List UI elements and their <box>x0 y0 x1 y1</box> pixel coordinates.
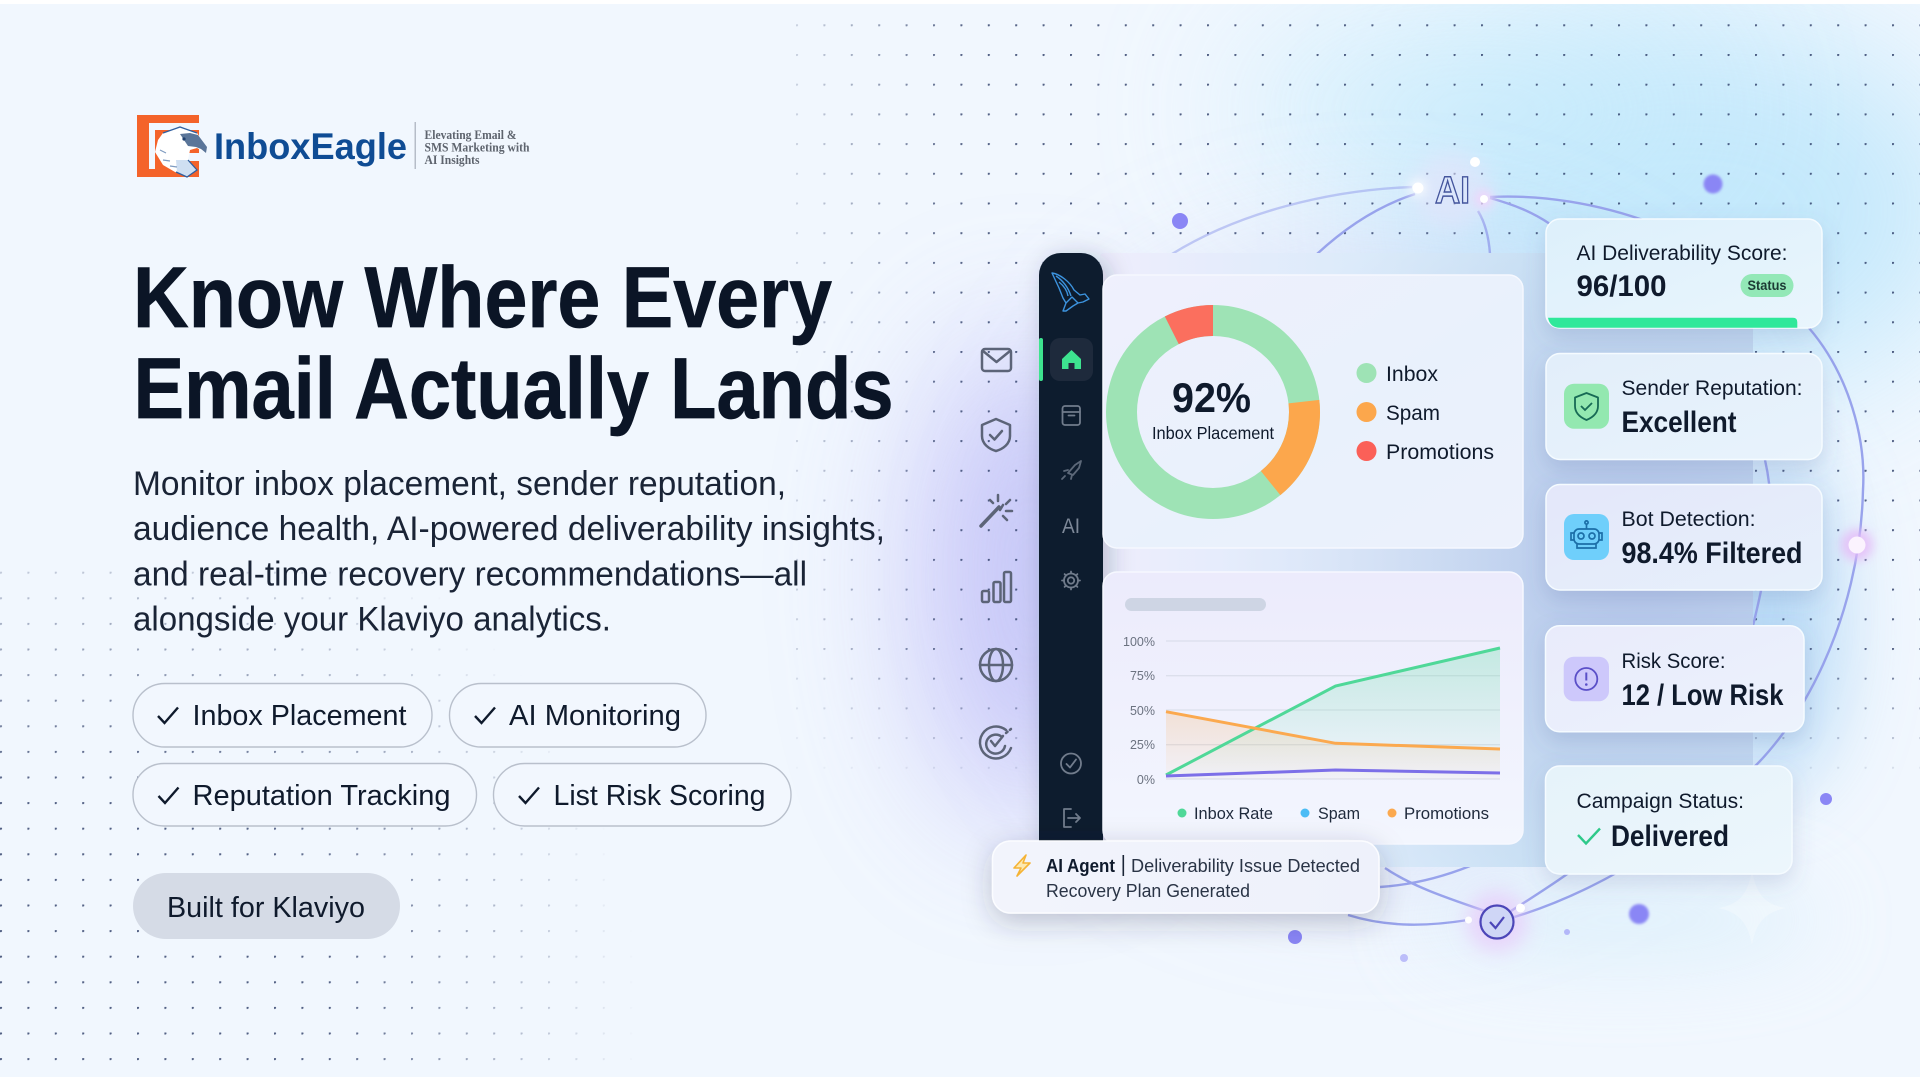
description paragraph: alongside your Klaviyo analytics. <box>133 600 611 638</box>
card: sender reputation <box>1546 354 1822 460</box>
chart legend: Spam <box>1318 805 1360 823</box>
card: risk score: Risk Score: <box>1622 649 1726 673</box>
icon: eagle logo <box>1052 273 1089 311</box>
card: bot detection: 98.4% Filtered <box>1622 537 1802 570</box>
card: AI deliverability score: 96/100 <box>1576 270 1666 303</box>
icon: magic wand <box>981 495 1012 526</box>
chip: List Risk Scoring <box>494 764 791 826</box>
panel: inbox placement donut <box>1103 275 1523 548</box>
node: right orbit <box>1841 529 1873 561</box>
donut legend <box>1356 362 1494 464</box>
icon: target check <box>980 726 1011 758</box>
donut legend: Inbox <box>1386 362 1438 386</box>
icon: gear <box>1062 572 1080 590</box>
title: Know Where Every <box>133 250 832 346</box>
title <box>133 250 894 437</box>
spam segment <box>1271 402 1304 483</box>
logo tagline: SMS Marketing with <box>424 140 530 154</box>
callout: AI agent <box>992 841 1379 913</box>
y axis labels: 50% <box>1130 704 1155 718</box>
progress bar <box>1548 318 1797 328</box>
icon: shield <box>1564 384 1609 429</box>
donut legend: Promotions <box>1386 440 1494 464</box>
icon: robot <box>1564 514 1609 560</box>
card: AI deliverability score <box>1546 219 1822 328</box>
area fills and lines <box>1166 648 1500 779</box>
sidebar <box>1039 253 1103 863</box>
y axis labels: 75% <box>1130 669 1155 683</box>
callout: AI agent: Recovery Plan Generated <box>1046 881 1250 901</box>
chip: Inbox Placement: Inbox Placement <box>192 700 407 732</box>
card: campaign status <box>1546 766 1792 874</box>
y axis labels: 0% <box>1137 773 1155 787</box>
chip: Reputation Tracking: Reputation Tracking <box>192 780 450 812</box>
callout: AI agent: Deliverability Issue Detected <box>1131 856 1360 876</box>
description paragraph: and real-time recovery recommendations—all <box>133 556 807 594</box>
dashboard panel <box>1100 253 1753 867</box>
title: Email Actually Lands <box>134 341 894 437</box>
icon: archive box <box>1062 406 1080 425</box>
description paragraph <box>133 465 885 638</box>
promotions segment <box>1172 320 1213 330</box>
description paragraph: Monitor inbox placement, sender reputation, <box>133 465 786 503</box>
icon: alert <box>1564 657 1609 701</box>
donut legend: Spam <box>1386 401 1440 425</box>
AI label with nodes <box>1409 152 1493 228</box>
icon: mail <box>982 349 1011 371</box>
logo tagline: AI Insights <box>424 153 480 167</box>
card: bot detection: Bot Detection: <box>1622 507 1756 531</box>
donut chart <box>1122 320 1304 504</box>
left icon rail <box>980 349 1012 758</box>
y axis labels: 100% <box>1123 635 1155 649</box>
logo tagline: Elevating Email & <box>424 128 516 142</box>
dot grid: bottom left <box>0 565 640 1077</box>
logo mark: eagle head <box>155 127 207 177</box>
floating purple dots <box>1172 174 1832 962</box>
chart legend <box>1178 805 1489 823</box>
placeholder title bar <box>1125 598 1266 611</box>
callout text: AI Agent <box>1046 856 1115 876</box>
logo mark: orange frame <box>137 115 199 177</box>
AI outlined text: AI <box>1435 170 1470 212</box>
card: sender reputation: Sender Reputation: <box>1622 376 1802 400</box>
description paragraph: audience health, AI-powered deliverability insights, <box>133 510 885 548</box>
card: risk score <box>1546 626 1804 732</box>
dot grid: top right <box>790 20 1920 792</box>
chip: List Risk Scoring: List Risk Scoring <box>554 780 766 812</box>
card: risk score: 12 / Low Risk <box>1622 679 1784 712</box>
chart legend: Promotions <box>1404 805 1489 823</box>
active home tile <box>1050 338 1093 381</box>
chip: Reputation Tracking <box>133 764 476 826</box>
decorative star <box>1718 870 1786 945</box>
active indicator <box>1039 338 1043 381</box>
card: bot detection <box>1546 484 1822 590</box>
icon: home <box>1062 350 1081 369</box>
icon: rocket <box>1062 461 1081 479</box>
chip: AI Monitoring: AI Monitoring <box>509 700 681 732</box>
chip: Inbox Placement <box>133 684 432 747</box>
icon: bar chart <box>982 572 1011 602</box>
panel: line chart <box>1103 572 1523 844</box>
icon: globe <box>980 649 1012 681</box>
icon: check <box>1578 828 1600 844</box>
card: campaign status: Campaign Status: <box>1576 789 1744 813</box>
icon: lightning <box>1014 855 1030 876</box>
donut chart: Inbox Placement <box>1152 423 1274 443</box>
icon: check circle <box>1061 754 1081 774</box>
orbit lines <box>1172 187 1863 925</box>
status pill <box>1740 274 1794 297</box>
y axis labels <box>1123 635 1155 787</box>
badge: Built for Klaviyo <box>133 873 400 939</box>
node: check circle <box>1465 892 1527 952</box>
chart legend: Inbox Rate <box>1194 805 1273 823</box>
icon: logout <box>1064 809 1080 827</box>
card: AI deliverability score: AI Deliverability Score: <box>1576 241 1788 265</box>
logo tagline <box>424 128 530 167</box>
badge: Built for Klaviyo: Built for Klaviyo <box>167 892 365 924</box>
sidebar AI label: AI <box>1062 515 1080 538</box>
card: campaign status: Delivered <box>1611 820 1729 853</box>
card: sender reputation: Excellent <box>1622 406 1737 439</box>
chip: AI Monitoring <box>450 684 706 747</box>
logo wordmark: InboxEagle <box>214 126 407 167</box>
y axis labels: 25% <box>1130 738 1155 752</box>
logo <box>137 115 530 177</box>
status pill: Status <box>1748 278 1786 293</box>
icon: shield <box>982 419 1010 451</box>
donut value: 92% <box>1172 374 1251 421</box>
